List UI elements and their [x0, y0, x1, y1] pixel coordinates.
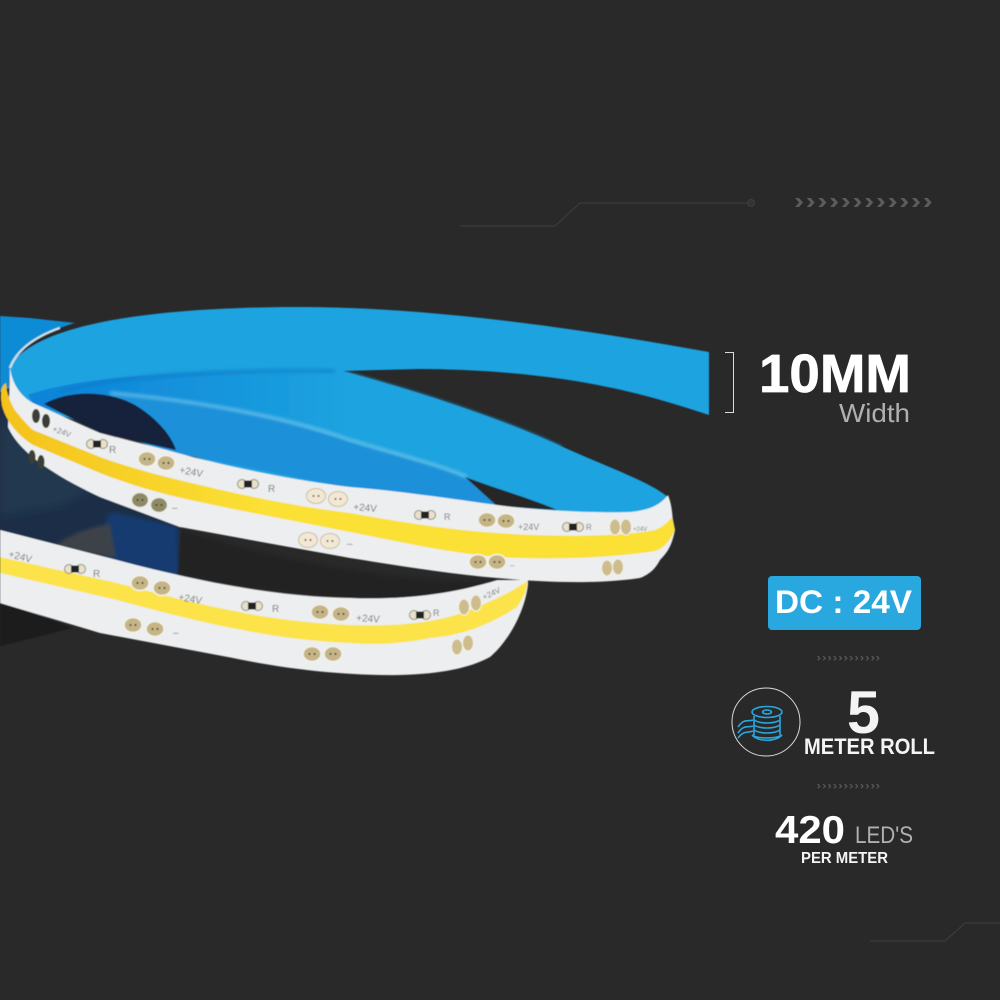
inner shadow arc: [60, 371, 335, 392]
lower strip labels: R: [93, 569, 100, 580]
bright band right of inner line: [343, 371, 563, 477]
5 meter roll: 5: [847, 679, 880, 746]
420 LEDs per meter: LED'S: [855, 822, 913, 849]
dark reel top above strip: [44, 394, 176, 450]
voltage badge: [768, 576, 921, 630]
420 LEDs per meter: PER METER: [801, 850, 888, 867]
rear blue strip end: [0, 316, 75, 392]
upper strip labels: +24V: [518, 522, 539, 532]
dark reel lower wedge: [0, 600, 72, 646]
5 meter roll: METER ROLL: [804, 734, 935, 759]
inner light line: [110, 393, 467, 477]
lower strip labels: R: [272, 604, 279, 615]
circuit line bottom right: [870, 923, 1000, 941]
dark reel: [0, 400, 182, 578]
upper strip dark pads: [28, 409, 50, 469]
decorative circuit line top: [460, 200, 754, 226]
420 LEDs per meter: [775, 809, 913, 867]
upper strip labels: –: [510, 561, 515, 570]
heading: 10MM width: 10MM: [759, 344, 911, 404]
icon: spool in circle: [732, 688, 800, 756]
lower strip labels: [7, 549, 503, 639]
lower strip pads: [64, 564, 482, 662]
lower strip labels: +24V: [177, 592, 203, 607]
reel blue patch: [102, 512, 178, 577]
lower strip labels: +24V: [356, 613, 380, 626]
inner darker blue: [28, 371, 500, 508]
upper strip labels: +24V: [178, 465, 204, 480]
5 meter roll: [804, 679, 935, 759]
upper strip: [1, 367, 675, 582]
upper strip labels: +24V: [633, 527, 647, 533]
lower strip body: [0, 530, 528, 675]
upper strip labels: –: [347, 539, 353, 550]
blue strip back: [9, 307, 709, 520]
upper strip labels: +24V: [353, 502, 378, 515]
upper strip labels: +24V: [51, 424, 73, 440]
darker lower inner blue: [110, 395, 500, 507]
upper strip yellow band: [1, 383, 675, 558]
heading: 10MM width: Width: [839, 398, 910, 428]
lower strip labels: +24V: [481, 585, 503, 602]
420 LEDs per meter: 420: [775, 809, 845, 852]
upper strip labels: R: [268, 484, 275, 495]
slate area left of reel: [0, 420, 90, 515]
upper strip body: [8, 367, 675, 582]
LED strip product photo: [0, 307, 709, 675]
lower strip labels: –: [173, 628, 179, 639]
upper strip labels: [51, 424, 647, 570]
width bracket: [725, 352, 734, 412]
upper strip labels: R: [444, 512, 451, 522]
lower strip yellow band: [0, 557, 527, 644]
small chevrons divider 2: [817, 784, 880, 788]
small chevrons divider 1: [817, 656, 880, 660]
upper strip labels: R: [109, 445, 116, 456]
shadow under strip: [178, 530, 497, 602]
outer rim highlight: [10, 328, 60, 368]
upper strip labels: R: [586, 523, 592, 532]
upper strip pads: [86, 440, 632, 576]
voltage badge: DC : 24V: [775, 584, 913, 620]
inner gap: [465, 477, 557, 510]
chevron row top: [795, 198, 932, 207]
lower strip labels: R: [433, 608, 440, 618]
lower strip labels: +24V: [7, 549, 33, 566]
lower strip: [0, 530, 528, 675]
upper strip labels: –: [172, 503, 178, 514]
grey wedge on reel: [55, 524, 116, 558]
